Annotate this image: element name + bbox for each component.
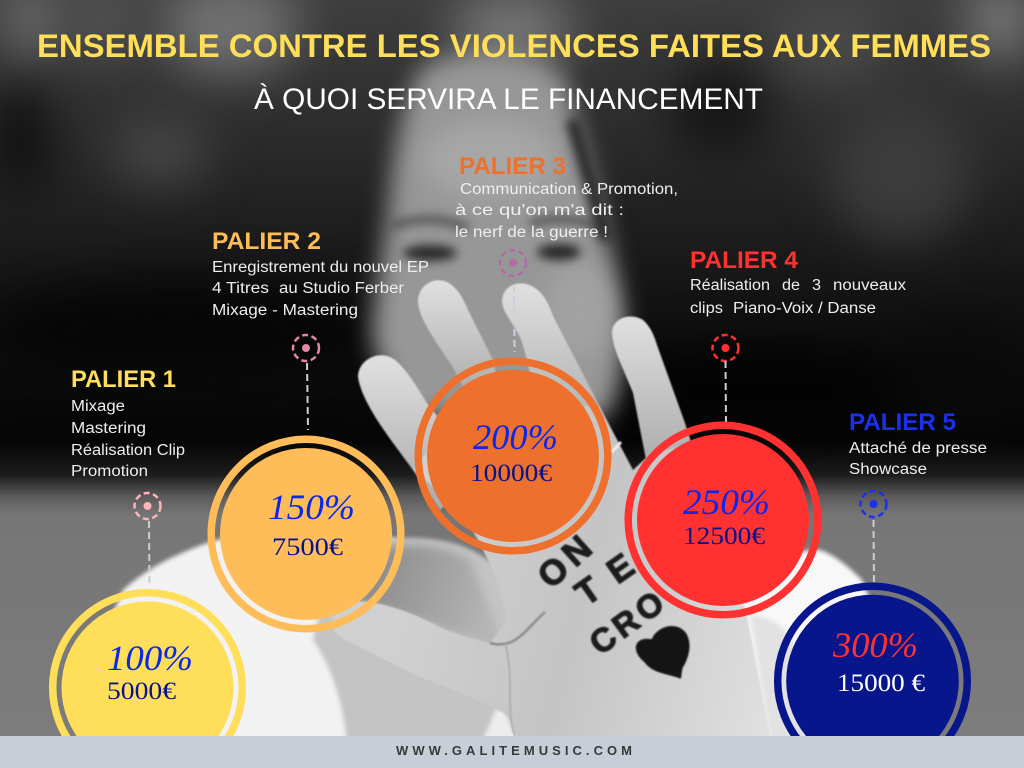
step 3 target marker and connector bbox=[500, 250, 526, 352]
step 1 circle 100% 5000€: 100% bbox=[107, 638, 193, 678]
handwriting on palm: ON TE CROIS and heart: ON bbox=[530, 528, 599, 596]
step 2 circle 150% 7500€: 150% bbox=[268, 487, 355, 527]
step 3 heading: PALIER 3 bbox=[459, 153, 566, 180]
index finger bbox=[418, 280, 500, 400]
step 1: Palier 1 bbox=[53, 366, 242, 768]
step 4 circle 250% 12500€ bbox=[628, 425, 818, 615]
step 1 heading: PALIER 1 bbox=[71, 366, 176, 393]
step 3 description: à ce qu'on m'a dit : bbox=[455, 202, 624, 219]
step 1 target marker and connector bbox=[134, 493, 160, 587]
step 4 description: clips bbox=[690, 300, 723, 317]
step 4 description: Piano-Voix / Danse bbox=[733, 300, 876, 317]
step 3 circle 200% 10000€: 10000€ bbox=[470, 460, 553, 487]
step 3 circle 200% 10000€: 200% bbox=[473, 417, 558, 457]
step 1 description: Mixage bbox=[71, 398, 125, 415]
subtitle: À QUOI SERVIRA LE FINANCEMENT bbox=[254, 83, 763, 116]
step 2 target marker and connector bbox=[293, 335, 319, 430]
step 4 circle 250% 12500€: 12500€ bbox=[683, 523, 766, 550]
blurred face and hair bbox=[372, 0, 625, 420]
step 4 heading: PALIER 4 bbox=[690, 247, 799, 274]
footer bar bbox=[0, 736, 1024, 768]
step 4 description: Réalisation bbox=[690, 277, 770, 294]
handwriting on palm: ON TE CROIS and heart: CRO bbox=[582, 584, 670, 662]
step 2 description: Enregistrement du nouvel EP bbox=[212, 259, 429, 276]
palm and thumb bbox=[332, 400, 773, 750]
step 2 description: Mixage - Mastering bbox=[212, 302, 358, 319]
step 5 description: Attaché de presse bbox=[849, 440, 987, 457]
step 3 description: le nerf de la guerre ! bbox=[455, 224, 608, 241]
handwriting on palm: ON TE CROIS and heart: TE bbox=[568, 546, 641, 614]
step 5 circle 300% 15000 €: 300% bbox=[832, 625, 918, 665]
step 4 target marker and connector bbox=[712, 335, 738, 425]
step 2 circle 150% 7500€: 7500€ bbox=[272, 534, 344, 561]
step 2 heading: PALIER 2 bbox=[212, 228, 321, 255]
step 2 circle 150% 7500€ bbox=[211, 439, 401, 629]
handwriting on palm: ON TE CROIS and heart bbox=[530, 528, 689, 678]
ring finger bbox=[612, 316, 700, 470]
step 1 circle 100% 5000€: 5000€ bbox=[107, 678, 177, 705]
step 2 description: 4 Titres bbox=[212, 280, 269, 297]
step 1 description: Réalisation Clip bbox=[71, 442, 185, 459]
step 5 target marker and connector bbox=[860, 491, 886, 587]
step 3: Palier 3 bbox=[418, 153, 678, 551]
pinky finger bbox=[358, 355, 480, 510]
step 3 circle 200% 10000€ bbox=[418, 361, 608, 551]
step 5 description bbox=[849, 440, 987, 478]
step 2 description bbox=[212, 259, 429, 319]
step 5 description: Showcase bbox=[849, 461, 927, 478]
step 4 description bbox=[690, 277, 906, 317]
step 1 circle 100% 5000€ bbox=[53, 593, 242, 768]
step 5 heading: PALIER 5 bbox=[849, 409, 956, 436]
step 3 description: Communication & Promotion, bbox=[460, 181, 678, 198]
hand with fingers and palm bbox=[332, 280, 773, 750]
step 4: Palier 4 bbox=[628, 247, 906, 615]
step 4 description: de bbox=[782, 277, 800, 294]
footer website: WWW.GALITEMUSIC.COM bbox=[396, 743, 632, 758]
step 4 description: nouveaux bbox=[833, 277, 906, 294]
step 1 description: Mastering bbox=[71, 420, 146, 437]
middle finger bbox=[502, 283, 610, 440]
step 1 description bbox=[71, 398, 185, 480]
step 4 circle 250% 12500€: 250% bbox=[683, 482, 770, 522]
white shirt bbox=[95, 527, 884, 768]
step 5 circle 300% 15000 €: 15000 € bbox=[837, 670, 926, 697]
step 2: Palier 2 bbox=[211, 228, 429, 629]
step 1 description: Promotion bbox=[71, 463, 148, 480]
title: ENSEMBLE CONTRE LES VIOLENCES FAITES AUX FEMMES bbox=[37, 28, 991, 64]
step 4 description: 3 bbox=[812, 277, 821, 294]
step 5 circle 300% 15000 € bbox=[778, 586, 967, 768]
step 2 description: au Studio Ferber bbox=[279, 280, 404, 297]
step 5: Palier 5 bbox=[778, 409, 987, 768]
step 3 description bbox=[455, 181, 678, 241]
